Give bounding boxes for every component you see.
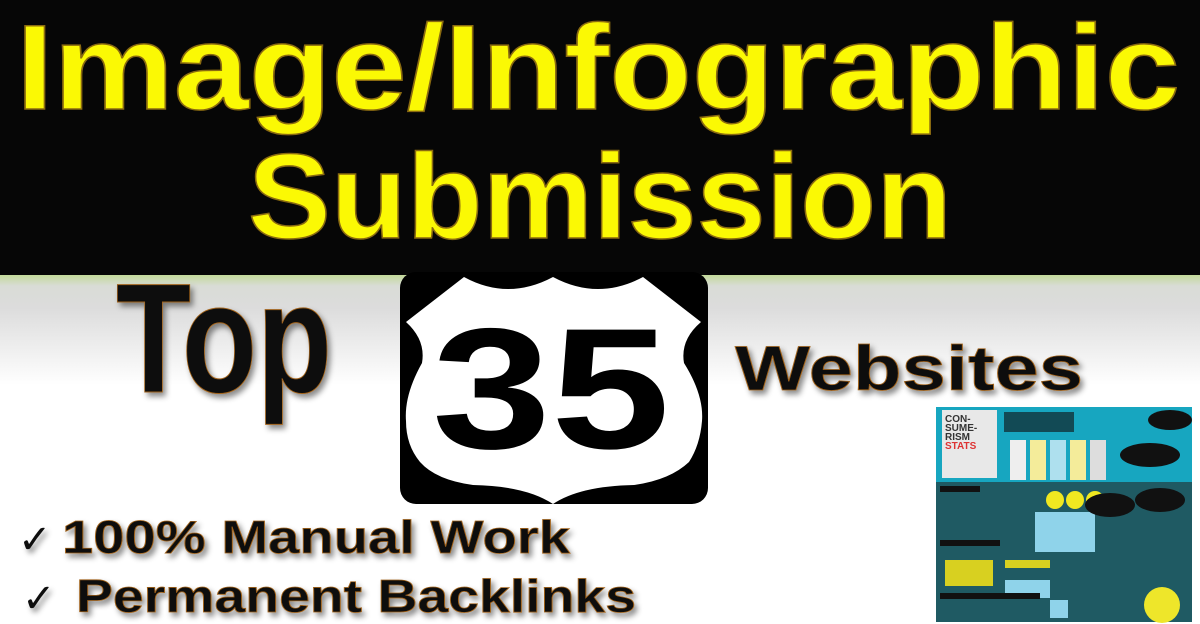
feature: manual work: ✓ — [18, 518, 52, 562]
feature list — [18, 511, 636, 622]
feature: permanent backlinks: ✓ — [22, 577, 56, 621]
thumbnail: consumerism infographic — [936, 407, 1192, 623]
icon: highway shield 35 — [400, 272, 708, 504]
title line 2: Submission — [248, 128, 952, 264]
text: Websites: Websites — [735, 334, 1083, 404]
thumbnail: consumerism infographic: CON- — [945, 414, 971, 425]
title line 1: Image/Infographic — [16, 0, 1180, 135]
thumbnail: consumerism infographic: SUME- — [945, 423, 977, 434]
feature: manual work: 100% Manual Work — [62, 511, 571, 563]
title banner — [0, 0, 1200, 275]
text: Top: Top — [116, 252, 332, 426]
thumbnail: consumerism infographic: RISM — [945, 432, 970, 443]
feature: permanent backlinks: Permanent Backlinks — [76, 570, 636, 622]
thumbnail: consumerism infographic: STATS — [945, 441, 977, 452]
icon: highway shield 35: 35 — [432, 293, 670, 485]
